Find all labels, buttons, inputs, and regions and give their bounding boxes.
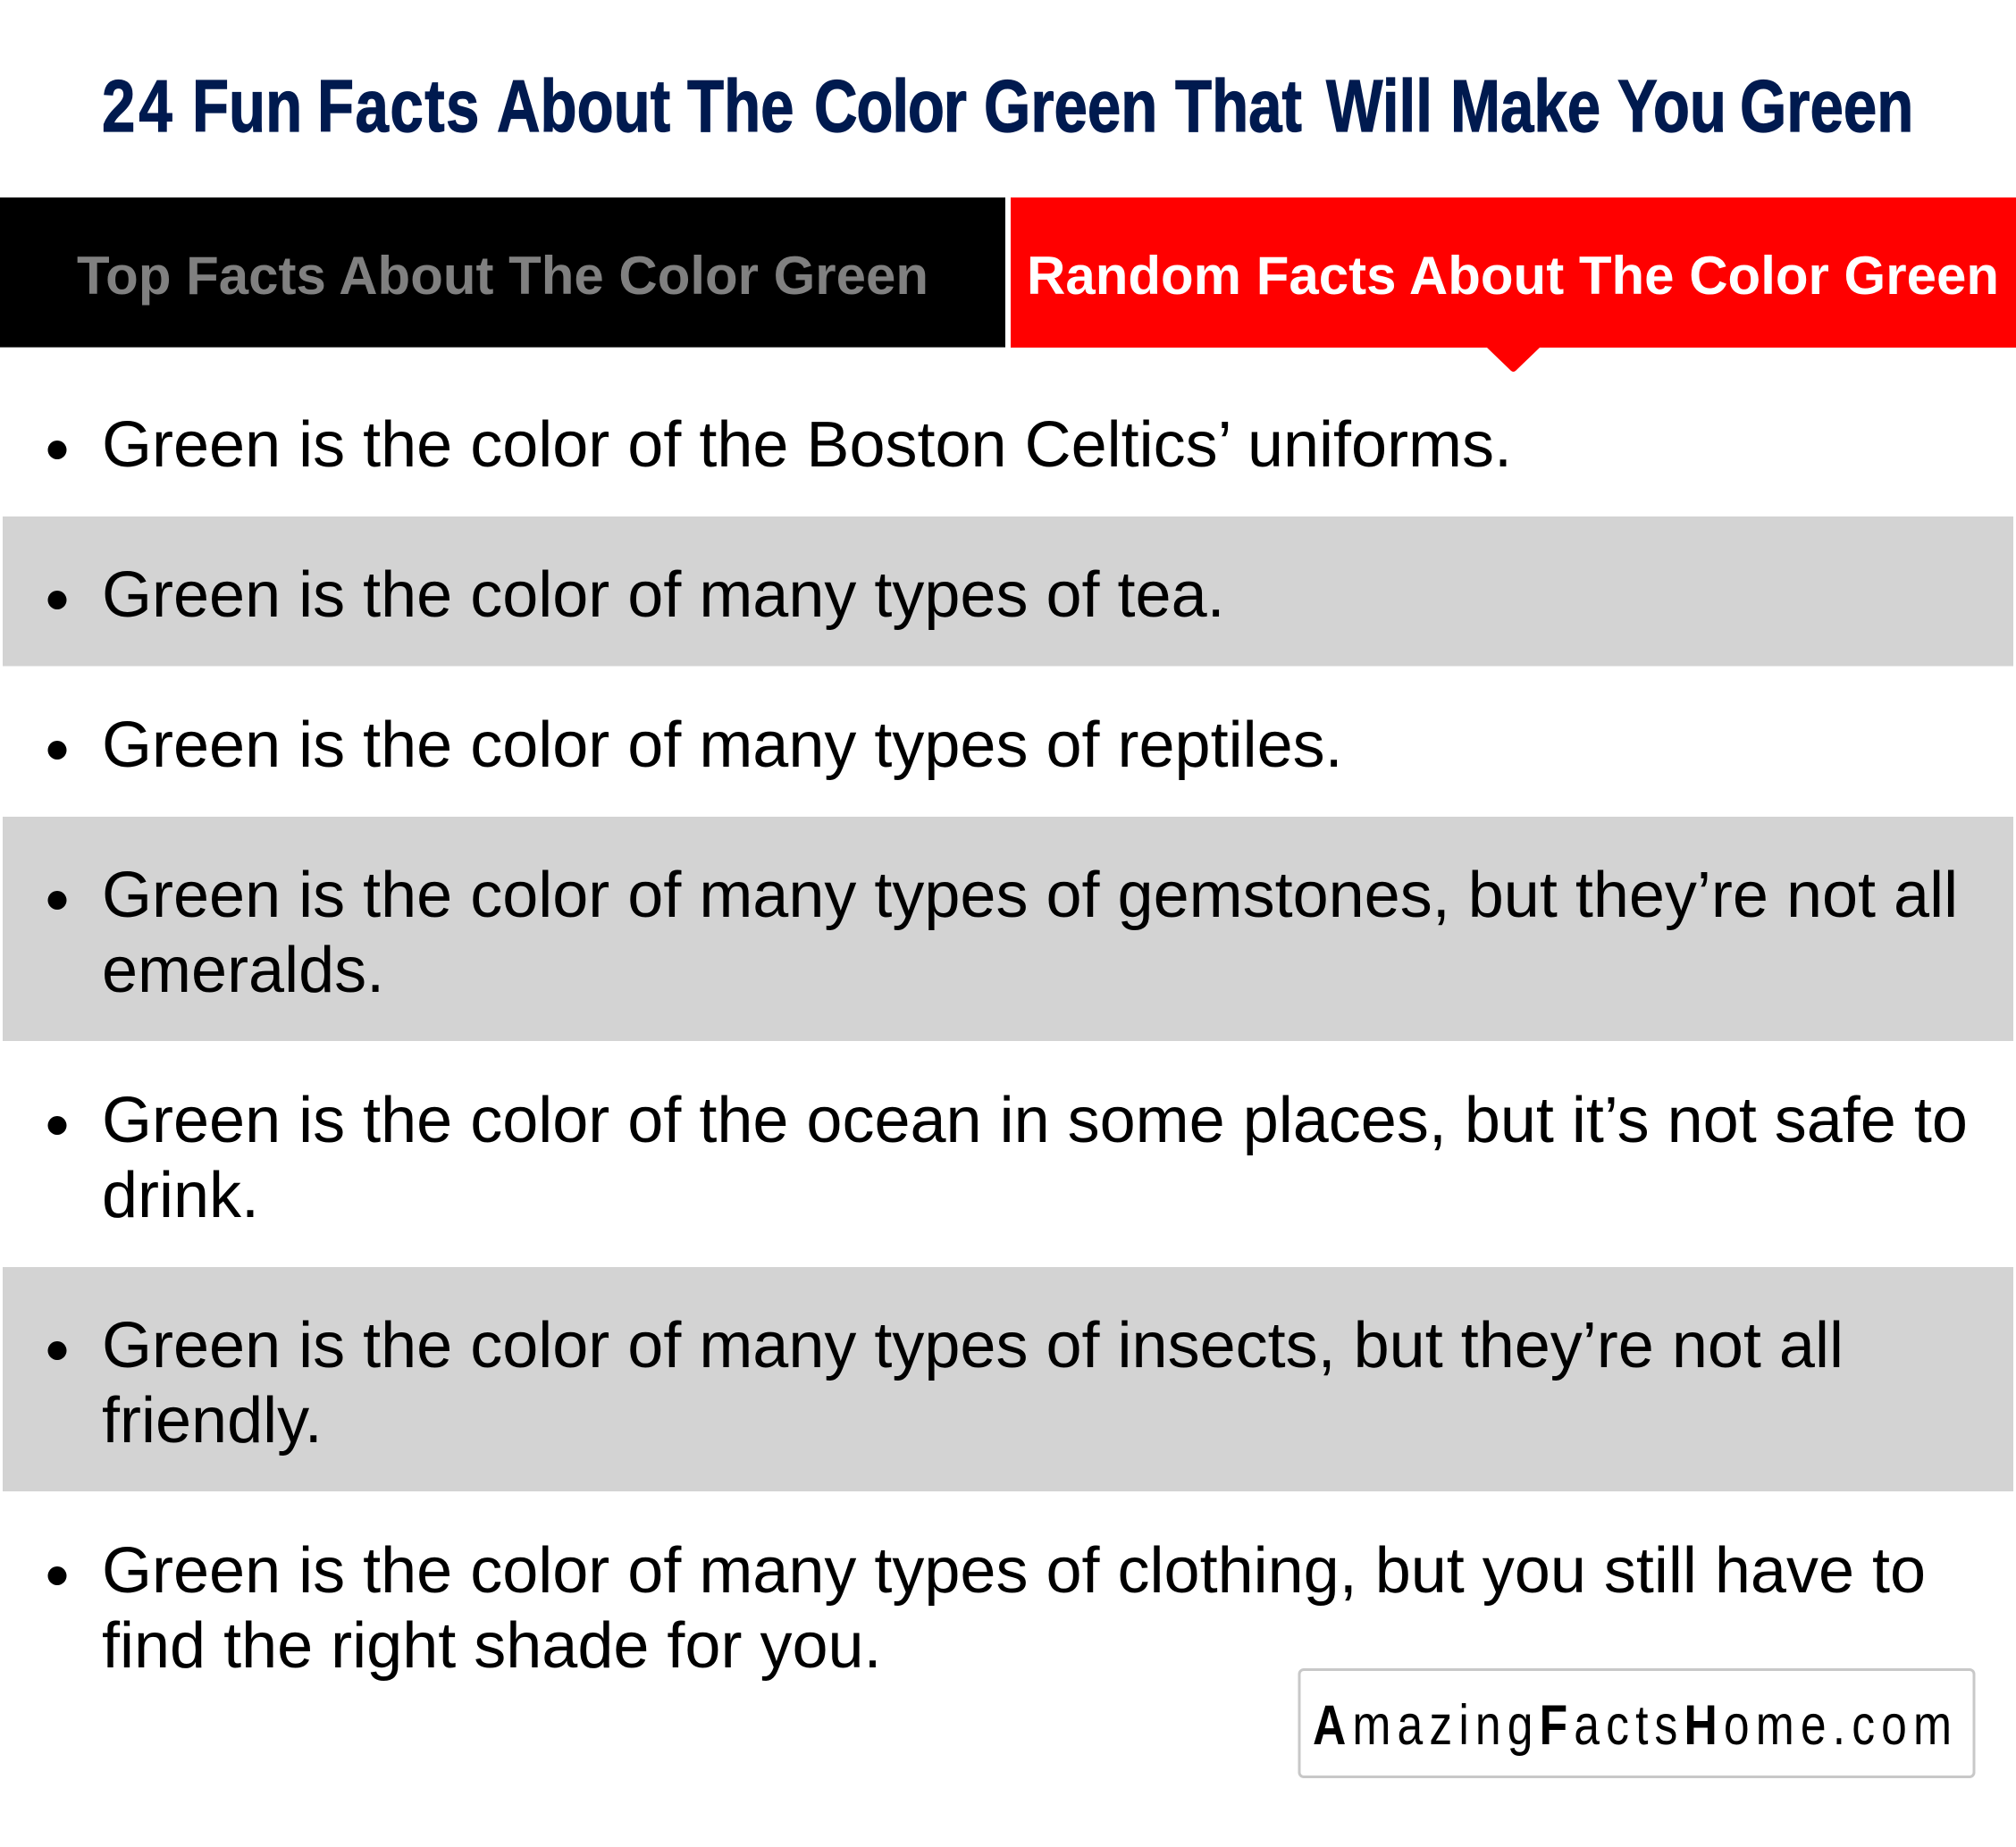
fact 6 row: friendly. <box>102 1385 323 1457</box>
title: Green <box>984 65 1174 148</box>
fact 1: Green is the color of the Boston Celtics’ uniforms. <box>102 409 1512 481</box>
tab: random facts <box>1011 197 2016 372</box>
title: Color <box>814 65 981 148</box>
fact 4 row: emeralds. <box>102 935 384 1006</box>
title: That <box>1175 65 1319 148</box>
fact 6 row: Green is the color of many types of insects, but they’re not all <box>102 1310 1844 1381</box>
fact 7: Green is the color of many types of clothing, but you still have to <box>102 1535 1926 1607</box>
watermark badge <box>1299 1669 1974 1776</box>
watermark text: AmazingFactsHome.com <box>1313 1694 1952 1757</box>
tab label: random facts: Random Facts About The Color Green <box>1027 246 1999 306</box>
fact 5: drink. <box>102 1160 259 1231</box>
fact 7 <box>48 1535 1926 1682</box>
title: Fun <box>192 65 319 148</box>
tab label: top facts: Top Facts About The Color Green <box>77 246 928 306</box>
title: Will <box>1326 65 1449 148</box>
fact 3: Green is the color of many types of reptiles. <box>102 709 1343 781</box>
title: Facts <box>317 65 499 148</box>
fact 2 row: Green is the color of many types of tea. <box>102 559 1225 631</box>
fact 4 row <box>3 817 2013 1041</box>
title: About <box>497 65 687 148</box>
title: You <box>1617 65 1743 148</box>
fact 4 row: Green is the color of many types of gemstones, but they’re not all <box>102 860 1958 931</box>
title: 24 <box>102 65 197 148</box>
fact 5 <box>48 1085 1968 1231</box>
title: Make <box>1450 65 1617 148</box>
fact 5: Green is the color of the ocean in some places, but it’s not safe to <box>102 1085 1968 1156</box>
title: The <box>687 65 811 148</box>
fact 2 row <box>3 516 2013 667</box>
tab: top facts <box>0 197 1005 348</box>
fact 6 row <box>3 1267 2013 1491</box>
fact 7: find the right shade for you. <box>102 1610 882 1682</box>
title: Green <box>1740 65 1913 148</box>
